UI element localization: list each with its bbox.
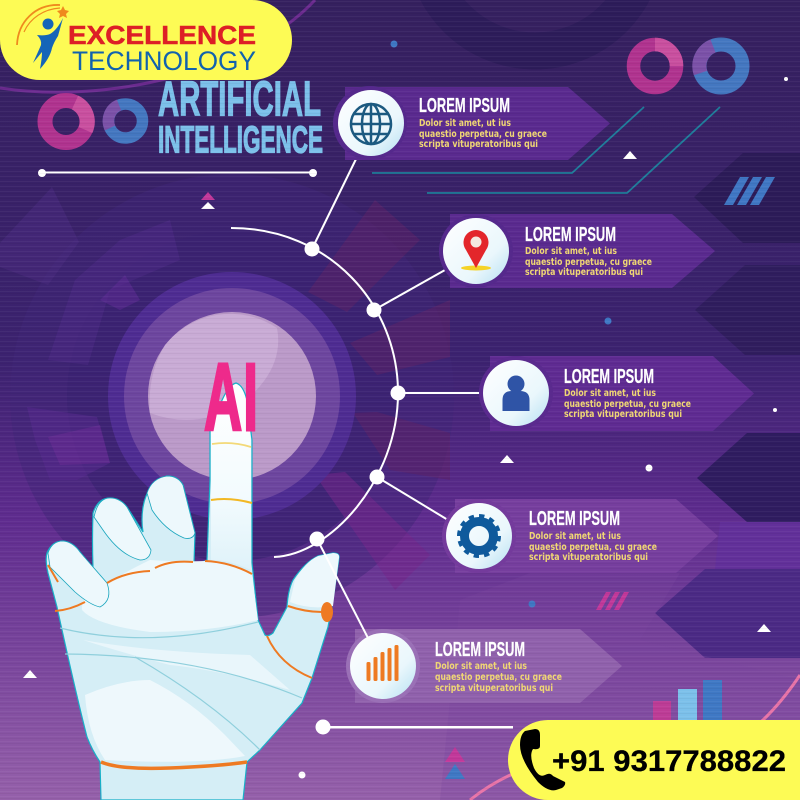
concentric AI circles xyxy=(108,272,356,520)
icon: gear xyxy=(460,516,498,556)
logo badge: EXCELLENCE xyxy=(68,20,256,50)
icon: person xyxy=(502,376,530,411)
banner 1: Dolor sit amet, ut ius xyxy=(419,118,511,129)
banner 4: quaestio perpetua, cu graece xyxy=(529,542,657,553)
title underline xyxy=(38,169,317,177)
logo badge: TECHNOLOGY xyxy=(72,46,256,76)
banner 2: quaestio perpetua, cu graece xyxy=(525,257,652,268)
banner 5 xyxy=(346,629,622,703)
AI label: AI xyxy=(204,344,259,451)
title xyxy=(158,72,323,162)
banner 3: Dolor sit amet, ut ius xyxy=(564,388,656,399)
banner 3: scripta vituperatoribus qui xyxy=(564,409,682,420)
banner 4 xyxy=(442,499,718,573)
banner 3: quaestio perpetua, cu graece xyxy=(564,399,691,410)
decorative teal lines xyxy=(372,107,720,193)
bottom rule xyxy=(316,720,513,734)
banner 5: quaestio perpetua, cu graece xyxy=(435,672,562,683)
title: ARTIFICIAL xyxy=(158,72,321,126)
banner 1: LOREM IPSUM xyxy=(419,95,510,117)
logo badge xyxy=(0,0,292,80)
icon: map pin xyxy=(461,230,491,270)
banner 2 xyxy=(439,214,715,288)
phone badge: +91 9317788822 xyxy=(552,745,786,778)
banner 4: Dolor sit amet, ut ius xyxy=(529,531,621,542)
triangles stacked xyxy=(445,747,465,779)
robot hand xyxy=(46,383,339,800)
banner 1: scripta vituperatoribus qui xyxy=(419,139,538,150)
connector nodes xyxy=(304,242,406,546)
icon: phone handset xyxy=(520,729,565,790)
icon: globe xyxy=(351,104,391,144)
phone badge xyxy=(508,720,800,800)
title: INTELLIGENCE xyxy=(158,120,323,162)
icon: logo figure xyxy=(17,5,69,69)
bar chart xyxy=(653,680,722,723)
banner 2: scripta vituperatoribus qui xyxy=(525,267,643,278)
banner 4: LOREM IPSUM xyxy=(529,508,620,530)
banner 1: quaestio perpetua, cu graece xyxy=(419,129,547,140)
pink curve xyxy=(470,675,800,800)
banner 5: scripta vituperatoribus qui xyxy=(435,683,553,694)
banner 3 xyxy=(479,356,754,431)
banner 1 xyxy=(333,86,610,160)
banner 5: LOREM IPSUM xyxy=(435,639,525,661)
banner 2: Dolor sit amet, ut ius xyxy=(525,246,617,257)
donut charts right xyxy=(634,44,742,88)
connector to banner 5 xyxy=(317,539,368,638)
connector arc xyxy=(231,155,485,557)
donut charts left xyxy=(45,100,142,142)
icon: rising bars xyxy=(366,645,398,681)
banner 4: scripta vituperatoribus qui xyxy=(529,552,648,563)
banner 2: LOREM IPSUM xyxy=(525,224,616,246)
banner 5: Dolor sit amet, ut ius xyxy=(435,661,527,672)
banner 3: LOREM IPSUM xyxy=(564,366,654,388)
